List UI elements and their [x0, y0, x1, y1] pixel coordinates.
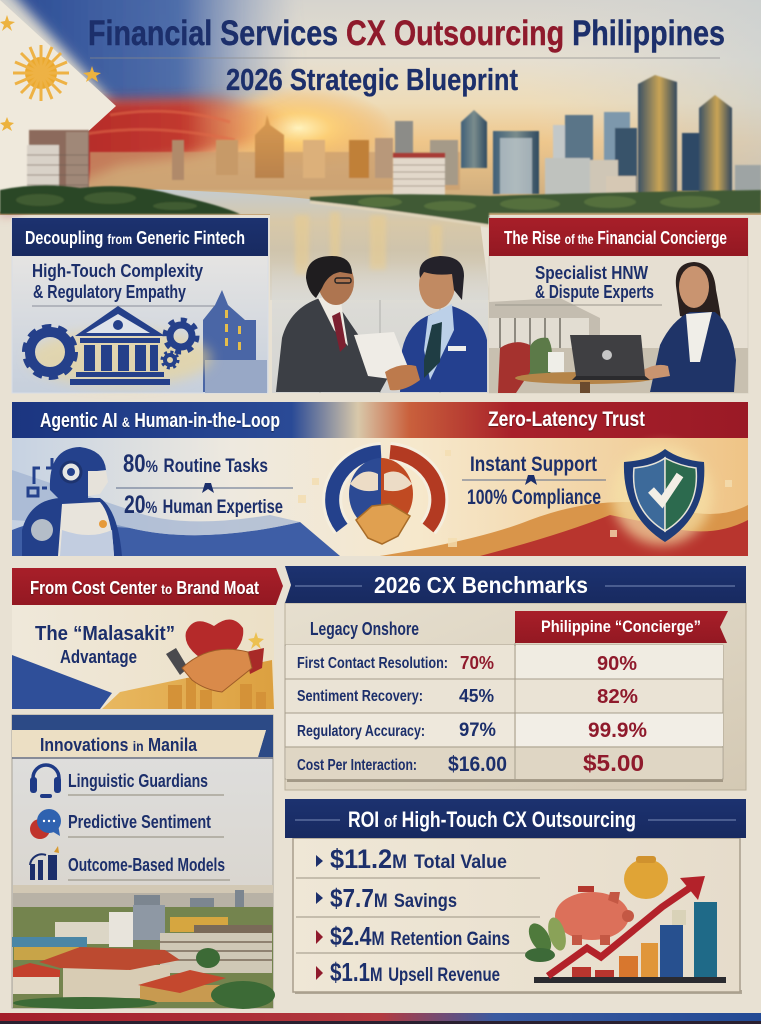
bottom stripe: [0, 1013, 761, 1024]
banner: from cost center to brand moat: [12, 568, 283, 605]
row: regulatory accuracy: 97%: [459, 720, 496, 741]
ROI shadow: [295, 990, 742, 994]
row: first contact resolution: First Contact Resolution:: [297, 655, 448, 672]
panel body: [12, 605, 274, 709]
light blue wash: [12, 470, 300, 535]
column header: legacy onshore: Legacy Onshore: [310, 619, 419, 639]
table backing: [285, 603, 746, 790]
band body: [12, 402, 748, 556]
row: cost per interaction: $16.00: [448, 753, 507, 776]
panel: decoupling from generic fintech: [12, 218, 268, 393]
row: sentiment recovery: [297, 686, 638, 708]
paper document: [354, 332, 414, 382]
item: predictive sentiment: [30, 809, 224, 839]
icon: bank building: [70, 306, 170, 385]
column header: philippine concierge: Philippine “Concierge”: [541, 617, 701, 636]
panel text: [32, 261, 203, 302]
icon: small gear: [162, 352, 178, 368]
ROI row: total value: $11.2M Total Value: [330, 844, 507, 874]
river reflections: [295, 212, 442, 275]
banner: from cost center to brand moat: From Cost Center to Brand Moat: [30, 578, 259, 598]
ROI heading: ROI of High-Touch CX Outsourcing: [348, 807, 636, 832]
red outer arc: [390, 452, 438, 528]
panel header: [12, 218, 268, 256]
icon: shield: [612, 445, 712, 545]
flag blue band: [0, 0, 300, 106]
panel text: & Regulatory Empathy: [33, 282, 186, 302]
malasakit text: Advantage: [60, 647, 137, 667]
navy top band: [12, 715, 273, 757]
row: first contact resolution: [297, 653, 637, 675]
table: [515, 372, 655, 393]
red-roof hotel: [393, 153, 445, 199]
panel body: [489, 218, 748, 393]
chart: growth bars and arrow: [534, 876, 726, 983]
flag red band: [0, 98, 300, 215]
left trees: [0, 185, 240, 214]
sun glow: [203, 86, 393, 170]
table grid: [285, 643, 723, 779]
building backdrop: [489, 298, 748, 393]
blue wave: [12, 519, 340, 556]
ROI row: retention gains: $2.4M Retention Gains: [330, 921, 510, 951]
blue triangle: [12, 655, 112, 709]
illustration: campus city scene: [12, 885, 275, 1009]
gold skyline: [168, 678, 266, 709]
stat: 80 percent routine tasks: 80% Routine Tasks: [123, 450, 268, 478]
pixel squares decor: [298, 450, 732, 547]
red wave: [480, 515, 748, 556]
icon: gold halo: [28, 330, 212, 386]
row: cost per interaction: $5.00: [583, 750, 644, 776]
left man: [276, 256, 392, 392]
window frames: [320, 300, 440, 393]
right towers: [395, 75, 761, 200]
icon: money bag: [624, 856, 668, 899]
text: 100 percent compliance: 100% Compliance: [467, 486, 601, 509]
row: cost per interaction: [297, 750, 644, 776]
icon: headset: [30, 765, 61, 798]
icon: blue tower: [203, 290, 267, 393]
hero: flag and skyline: [0, 0, 761, 300]
heading: agentic AI: Agentic AI & Human-in-the-Loop: [40, 410, 280, 432]
icon: leaves: [524, 916, 569, 962]
flag white triangle: [0, 0, 116, 212]
malasakit text: [35, 623, 175, 667]
icon: piggy bank: [555, 886, 634, 945]
benchmarks heading: 2026 CX Benchmarks: [374, 572, 588, 598]
ROI row: savings: $7.7M Savings: [330, 883, 457, 913]
panel heading: Decoupling from Generic Fintech: [25, 228, 245, 248]
subtitle: 2026 Strategic Blueprint: [226, 62, 518, 97]
benchmarks header: [285, 566, 746, 603]
cream heading tab: [12, 730, 266, 757]
river far bank: [310, 190, 761, 226]
panel body: [12, 715, 273, 1008]
office backdrop: [272, 262, 488, 393]
row: first contact resolution: 90%: [597, 653, 637, 675]
clasped hands: [356, 504, 410, 544]
item: linguistic guardians: [30, 765, 224, 798]
distant skyline: [90, 115, 460, 190]
flag sun: [13, 45, 69, 101]
text: instant support: Instant Support: [470, 453, 597, 476]
divider: [495, 304, 662, 306]
item: linguistic guardians: Linguistic Guardians: [68, 771, 208, 791]
hazy sky right: [300, 0, 761, 190]
row: sentiment recovery: Sentiment Recovery:: [297, 688, 423, 705]
blue outer arc: [332, 452, 381, 528]
divider with star: [462, 475, 606, 485]
icon: bar chart arc: [30, 846, 59, 880]
red wave streaks: [80, 111, 235, 140]
table body: [285, 645, 723, 779]
row: cost per interaction: Cost Per Interaction:: [297, 757, 417, 774]
row shades: [286, 645, 723, 779]
divider: [32, 305, 225, 307]
left towers: [27, 130, 89, 197]
row: sentiment recovery: 82%: [597, 686, 638, 708]
woman: [640, 262, 736, 392]
row: regulatory accuracy: [297, 719, 647, 742]
panel text: Specialist HNW: [535, 263, 648, 283]
panel header: [489, 218, 748, 256]
orange wave: [380, 502, 748, 556]
icon: heart: [186, 619, 243, 666]
title: Financial Services CX Outsourcing Philippines: [88, 14, 725, 53]
icon: star: [248, 632, 264, 649]
panel text: High-Touch Complexity: [32, 261, 203, 281]
table shadow: [287, 779, 723, 782]
center illustration: river and handshake: [272, 256, 488, 393]
title rule: [90, 57, 720, 59]
panel body: [12, 218, 268, 393]
icon: right gear: [165, 320, 197, 352]
heading: zero-latency trust: Zero-Latency Trust: [488, 408, 645, 431]
laptop: [570, 335, 650, 380]
inner disc: [349, 458, 381, 530]
sunset sky: [0, 0, 761, 215]
panel: innovations in manila: [12, 715, 275, 1009]
band header: [12, 402, 748, 438]
coffee cup: [548, 352, 564, 372]
red chair: [498, 342, 530, 393]
gold wedge: [102, 660, 274, 709]
row: regulatory accuracy: Regulatory Accuracy:: [297, 723, 425, 740]
column header: philippine concierge: [515, 611, 728, 643]
row: sentiment recovery: 45%: [459, 686, 494, 706]
ROI body: [293, 838, 740, 992]
right man: [400, 256, 487, 392]
panel: ROI of high-touch CX outsourcing: [285, 799, 746, 994]
panel: 2026 CX benchmarks: [285, 566, 746, 790]
panel text: [535, 263, 654, 302]
ROI row: upsell revenue: $1.1M Upsell Revenue: [330, 957, 500, 987]
panel: rise of the financial concierge: [489, 218, 748, 393]
icon: robot: [22, 447, 122, 556]
item: predictive sentiment: Predictive Sentiment: [68, 812, 211, 832]
heading: Innovations in Manila: [40, 735, 198, 755]
malasakit text: The “Malasakit”: [35, 623, 175, 645]
item: outcome-based models: [30, 846, 230, 880]
row: first contact resolution: 70%: [460, 653, 494, 673]
icon: handshake: [166, 648, 264, 692]
row: regulatory accuracy: 99.9%: [588, 719, 647, 742]
panel text: & Dispute Experts: [535, 282, 654, 302]
stat: 20 percent human expertise: 20% Human Expertise: [124, 491, 283, 519]
panel: the malasakit advantage: [12, 605, 274, 709]
icon: handshake emblem: [332, 452, 438, 544]
ROI header: [285, 799, 746, 838]
item: outcome-based models: Outcome-Based Models: [68, 855, 225, 875]
divider with star: [116, 483, 293, 493]
clasped hands: [385, 365, 420, 390]
icon: large gear: [25, 327, 75, 377]
inner silhouettes: [350, 472, 378, 491]
icon: chat bubbles: [30, 809, 61, 839]
river: [130, 189, 490, 300]
band: agentic AI and zero-latency trust: [12, 402, 748, 556]
flag stars: [0, 15, 101, 131]
